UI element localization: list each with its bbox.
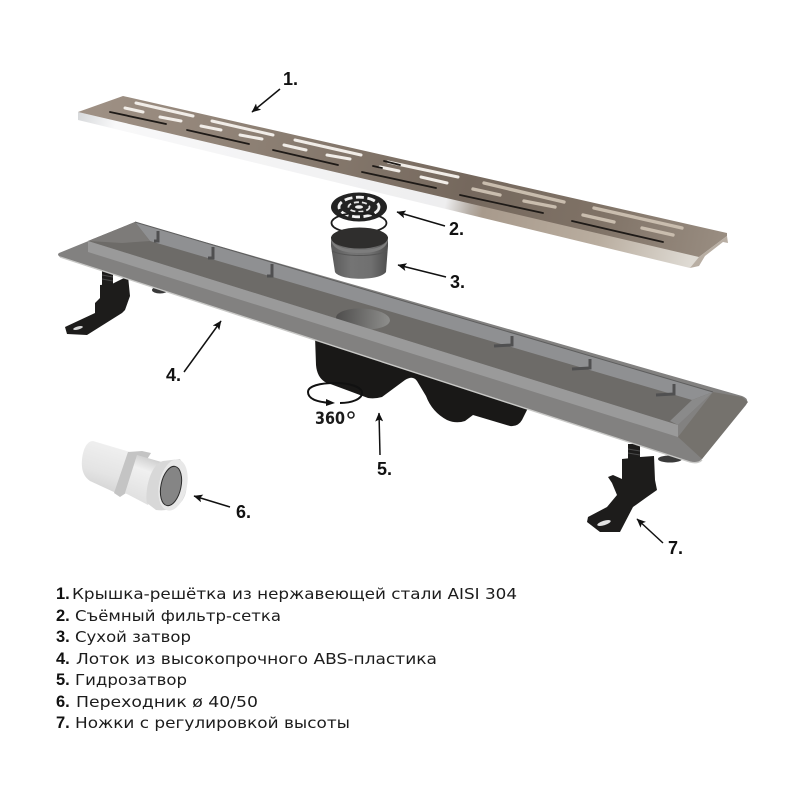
item 5: 5. (56, 671, 70, 689)
item 2: Съёмный фильтр-сетка (75, 607, 281, 625)
sealing ring (332, 213, 386, 233)
label 1: 1. (283, 69, 298, 89)
item 3: Сухой затвор (75, 628, 191, 646)
label 6: 6. (236, 502, 251, 522)
tray interior floor (88, 222, 713, 425)
grate cover (78, 96, 728, 268)
grate slots (110, 103, 682, 242)
arrow 5 (379, 413, 380, 455)
item 3: 3. (56, 628, 70, 646)
adapter pipe (82, 441, 192, 513)
tray tabs (154, 231, 674, 395)
item 2: 2. (56, 607, 70, 625)
item 4: 4. (56, 650, 70, 668)
flange lower lip (60, 257, 702, 463)
small stud under tray, left (152, 286, 168, 294)
black water trap (315, 336, 528, 426)
left adjustable foot (65, 270, 130, 335)
small stud under tray, right (658, 456, 682, 462)
grate right lip (690, 236, 728, 268)
item 6: 6. (56, 693, 70, 711)
label 2: 2. (449, 219, 464, 239)
dry seal cup (331, 228, 388, 279)
item 6: Переходник ø 40/50 (76, 693, 258, 711)
tray left inner wall (88, 222, 150, 243)
back edge line (135, 222, 713, 392)
arrow 1 (252, 89, 280, 112)
adapter mid tube (125, 455, 165, 505)
item 4: Лоток из высокопрочного ABS-пластика (76, 650, 437, 668)
label 5: 5. (377, 459, 392, 479)
arrow 4 (184, 321, 221, 372)
label 7: 7. (668, 538, 683, 558)
filter mesh (331, 192, 387, 222)
tray right inner wall (670, 392, 713, 425)
arrow 2 (397, 212, 445, 226)
grate front edge (78, 112, 699, 268)
360 rotation mark (308, 383, 362, 429)
right adjustable foot (587, 444, 657, 532)
tray back wall (135, 222, 713, 400)
label 3: 3. (450, 272, 465, 292)
arrow 7 (637, 519, 663, 543)
adapter narrow tube (82, 441, 130, 493)
item 1: 1. (56, 585, 70, 603)
tray flange (58, 222, 747, 463)
label 4: 4. (166, 365, 181, 385)
grate top face (78, 96, 727, 257)
360 rotation mark: 360 (315, 409, 345, 429)
drain hole (335, 307, 391, 331)
item 5: Гидрозатвор (75, 671, 187, 689)
adapter socket (146, 459, 187, 510)
tray front wall (88, 241, 678, 437)
tray flange right (678, 392, 748, 459)
adapter shoulder (114, 451, 151, 497)
item 1: Крышка-решётка из нержавеющей стали AISI 304 (72, 585, 517, 603)
arrow 3 (398, 265, 446, 277)
drain tray (58, 222, 748, 463)
parts list (56, 585, 517, 732)
item 7: 7. (56, 714, 70, 732)
arrow 6 (194, 496, 230, 507)
item 7: Ножки с регулировкой высоты (75, 714, 350, 732)
